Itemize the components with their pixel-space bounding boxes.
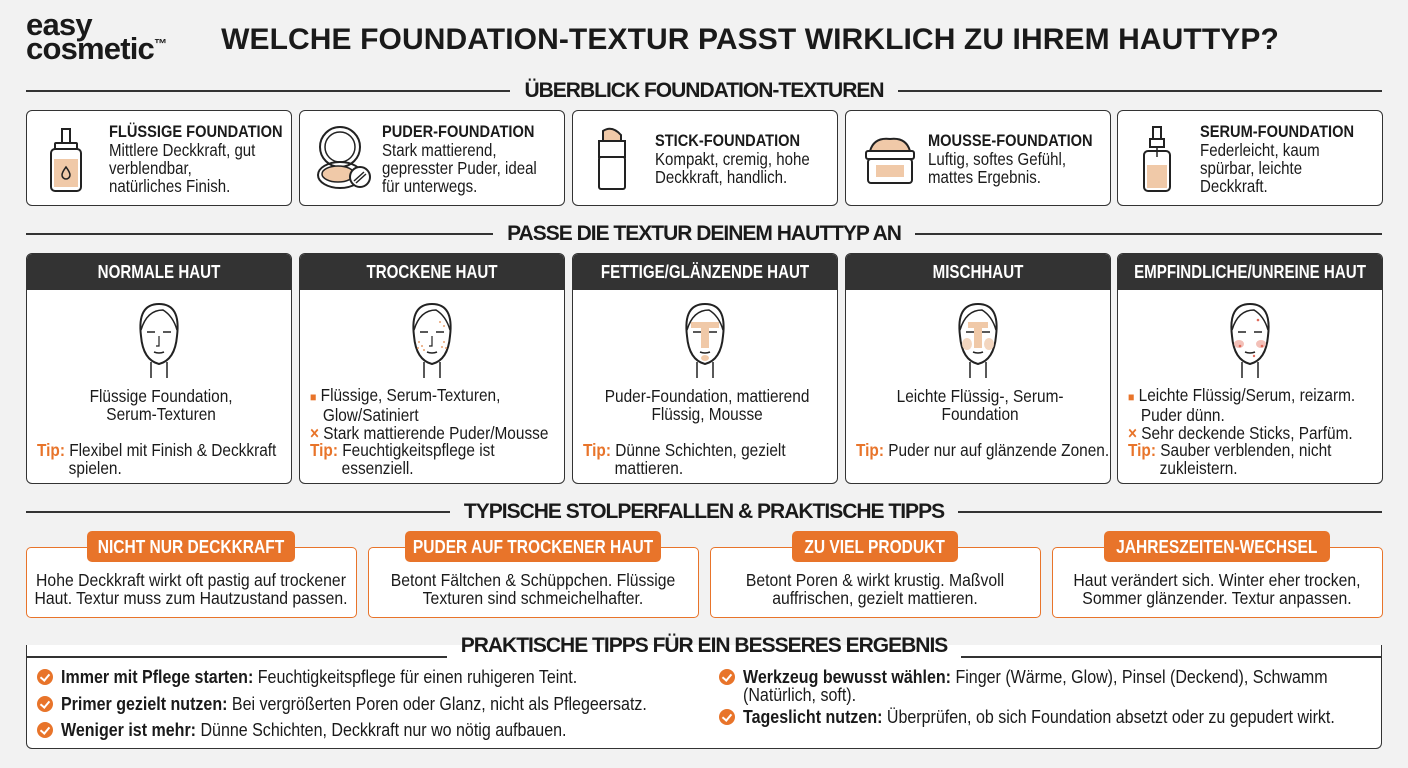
tag: seasons	[1104, 531, 1330, 562]
text: ■ Leichte Flüssig/Serum, reizarm.	[1128, 385, 1355, 405]
panel: dry skin: TROCKENE HAUT	[366, 262, 498, 282]
text	[109, 122, 283, 196]
text: Flüssig, Mousse	[651, 404, 763, 424]
pitfall: too much product: Betont Poren & wirkt krustig. Maßvoll	[746, 570, 1004, 590]
card: stick foundation	[572, 110, 838, 206]
tag: coverage	[87, 531, 295, 562]
text: Deckkraft.	[1200, 176, 1268, 196]
text	[928, 131, 1093, 187]
section heading: skin types: PASSE DIE TEXTUR DEINEM HAUTTYP AN	[507, 222, 901, 245]
logo	[26, 7, 166, 66]
text: Deckkraft, handlich.	[655, 167, 787, 187]
pitfall: seasons: Haut verändert sich. Winter eher trocken,	[1073, 570, 1361, 590]
tip item 3: Weniger ist mehr: Dünne Schichten, Deckkraft nur wo nötig aufbauen.	[61, 720, 566, 740]
text: Foundation	[942, 404, 1019, 424]
tip item 4: Werkzeug bewusst wählen: Finger (Wärme, Glow), Pinsel (Deckend), Schwamm	[743, 667, 1328, 687]
text	[655, 131, 810, 187]
tip: Tip: Sauber verblenden, nicht	[1128, 440, 1331, 460]
card: powder foundation	[299, 110, 565, 206]
text: Glow/Satiniert	[323, 405, 419, 425]
logo: easy	[26, 7, 92, 42]
text: MOUSSE-FOUNDATION	[928, 131, 1093, 150]
icon: face with zones	[958, 303, 998, 378]
text: ■ Flüssige, Serum-Texturen,	[310, 385, 500, 405]
icon: compact	[317, 126, 371, 189]
tip item 4	[719, 667, 1328, 705]
tip	[37, 440, 276, 478]
pitfall: powder: Texturen sind schmeichelhafter.	[423, 588, 643, 608]
tip: Tip: Puder nur auf glänzende Zonen.	[856, 440, 1109, 460]
tip	[583, 440, 786, 478]
tip: zukleistern.	[1160, 458, 1238, 478]
section heading: practical tips: PRAKTISCHE TIPPS FÜR EIN BESSERES ERGEBNIS	[461, 634, 947, 657]
tip: essenziell.	[342, 458, 414, 478]
panel: sensitive skin: EMPFINDLICHE/UNREINE HAUT	[1134, 262, 1366, 282]
tag: too much product: ZU VIEL PRODUKT	[805, 536, 945, 557]
panel: dry skin	[299, 253, 565, 484]
panel: normal skin	[26, 253, 292, 484]
text: PUDER-FOUNDATION	[382, 122, 534, 141]
text: mattes Ergebnis.	[928, 167, 1041, 187]
text: Mittlere Deckkraft, gut	[109, 140, 255, 160]
text: × Sehr deckende Sticks, Parfüm.	[1128, 423, 1353, 443]
icon: face with T-zone	[685, 303, 725, 378]
text: für unterwegs.	[382, 176, 477, 196]
text	[382, 122, 537, 196]
pitfall: too much product: auffrischen, gezielt mattieren.	[772, 588, 978, 608]
tip: Tip: Dünne Schichten, gezielt	[583, 440, 786, 460]
panel: sensitive skin	[1117, 253, 1383, 484]
title: WELCHE FOUNDATION-TEXTUR PASST WIRKLICH ZU IHREM HAUTTYP?	[221, 23, 1279, 56]
text: natürliches Finish.	[109, 176, 230, 196]
pitfall: powder: Betont Fältchen & Schüppchen. Flüssige	[391, 570, 675, 590]
tip: Tip: Feuchtigkeitspflege ist	[310, 440, 495, 460]
card: serum foundation	[1117, 110, 1383, 206]
panel: combination skin	[845, 253, 1111, 484]
tip: spielen.	[69, 458, 122, 478]
text: × Stark mattierende Puder/Mousse	[310, 423, 548, 443]
panel: oily skin	[572, 253, 838, 484]
card: mousse foundation	[845, 110, 1111, 206]
text	[897, 386, 1064, 424]
text: SERUM-FOUNDATION	[1200, 122, 1354, 141]
panel: combination skin: MISCHHAUT	[933, 262, 1023, 282]
tip	[1128, 440, 1332, 478]
tip: Tip: Flexibel mit Finish & Deckkraft	[37, 440, 276, 460]
panel: oily skin: FETTIGE/GLÄNZENDE HAUT	[601, 262, 809, 282]
text: Puder-Foundation, mattierend	[605, 386, 809, 406]
panel: normal skin: NORMALE HAUT	[98, 262, 220, 282]
text: Serum-Texturen	[106, 404, 216, 424]
text: Leichte Flüssig-, Serum-	[897, 386, 1064, 406]
section heading: overview: ÜBERBLICK FOUNDATION-TEXTUREN	[524, 79, 884, 102]
text: verblendbar,	[109, 158, 192, 178]
tag: powder	[405, 531, 661, 562]
pitfall: coverage: Hohe Deckkraft wirkt oft pastig auf trockener	[36, 570, 346, 590]
text	[1128, 385, 1355, 443]
tag: powder: PUDER AUF TROCKENER HAUT	[413, 536, 653, 557]
tip item 5: Tageslicht nutzen: Überprüfen, ob sich Foundation absetzt oder zu gepudert wirkt.	[743, 707, 1335, 727]
icon: jar	[865, 138, 915, 184]
pitfall: powder	[368, 547, 699, 618]
text: spürbar, leichte	[1200, 158, 1302, 178]
tip item 1: Immer mit Pflege starten: Feuchtigkeitspflege für einen ruhigeren Teint.	[61, 667, 577, 687]
pitfall: coverage	[26, 547, 357, 618]
text: Luftig, softes Gefühl,	[928, 149, 1066, 169]
text: STICK-FOUNDATION	[655, 131, 800, 150]
tip	[310, 440, 495, 478]
text: Puder dünn.	[1141, 405, 1225, 425]
text	[310, 385, 548, 443]
icon: stick	[598, 128, 626, 190]
icon: face	[139, 303, 179, 378]
text: Federleicht, kaum	[1200, 140, 1320, 160]
pitfall: coverage: Haut. Textur muss zum Hautzustand passen.	[34, 588, 348, 608]
icon: dropper bottle	[50, 128, 82, 192]
text: FLÜSSIGE FOUNDATION	[109, 122, 283, 141]
text: Stark mattierend,	[382, 140, 497, 160]
text	[1200, 122, 1354, 196]
tip item 4: (Natürlich, soft).	[743, 685, 856, 705]
text	[605, 386, 809, 424]
tag: too much product	[792, 531, 958, 562]
text: gepresster Puder, ideal	[382, 158, 537, 178]
panel: practical tips	[26, 645, 1382, 749]
tag: seasons: JAHRESZEITEN-WECHSEL	[1116, 536, 1318, 557]
icon: face with dry spots	[412, 303, 452, 378]
logo: cosmetic™	[26, 31, 166, 66]
pitfall: too much product	[710, 547, 1041, 618]
icon: face with blemishes	[1230, 303, 1270, 378]
pitfall: seasons	[1052, 547, 1383, 618]
tip item 2: Primer gezielt nutzen: Bei vergrößerten Poren oder Glanz, nicht als Pflegeersatz.	[61, 694, 647, 714]
text: Flüssige Foundation,	[90, 386, 233, 406]
pitfall: seasons: Sommer glänzender. Textur anpassen.	[1082, 588, 1352, 608]
card: liquid foundation	[26, 110, 292, 206]
text	[90, 386, 233, 424]
icon: serum bottle	[1143, 126, 1171, 192]
text: Kompakt, cremig, hohe	[655, 149, 810, 169]
tip: mattieren.	[615, 458, 683, 478]
section heading: pitfalls: TYPISCHE STOLPERFALLEN & PRAKTISCHE TIPPS	[464, 500, 944, 523]
tag: coverage: NICHT NUR DECKKRAFT	[98, 536, 284, 557]
